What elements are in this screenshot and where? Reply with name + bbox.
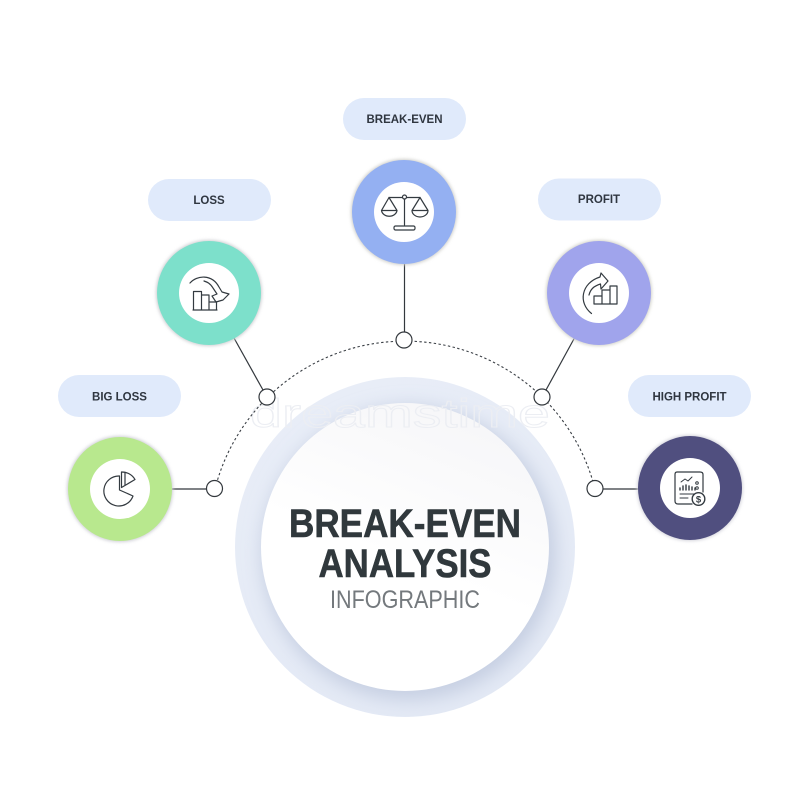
label: profit — [538, 178, 661, 220]
connector: break-even — [396, 264, 412, 348]
icon: financial report — [675, 472, 705, 505]
watermark: dreamstime — [250, 392, 550, 436]
label: big loss: BIG LOSS — [92, 392, 147, 404]
connector: big loss — [172, 480, 222, 496]
title: ANALYSIS — [318, 542, 492, 586]
central circle — [235, 377, 575, 717]
label: loss: LOSS — [193, 195, 225, 207]
icon: balance scale — [382, 195, 428, 230]
label: high profit: HIGH PROFIT — [652, 392, 727, 404]
label: break-even — [343, 98, 466, 140]
title: BREAK-EVEN — [289, 502, 521, 546]
connector: loss — [234, 338, 275, 405]
node: big loss — [67, 436, 173, 542]
dotted arc — [215, 341, 595, 489]
node: profit — [546, 240, 652, 346]
label: profit: PROFIT — [578, 194, 620, 206]
icon: rising bars with arrow — [583, 273, 617, 314]
title — [289, 502, 521, 614]
label: big loss — [58, 375, 181, 417]
node: high profit — [637, 435, 743, 541]
node: loss — [156, 240, 262, 346]
label: high profit — [628, 375, 751, 417]
connector: profit — [534, 337, 575, 405]
label: break-even: BREAK-EVEN — [366, 114, 443, 126]
icon: dollar sign: $ — [696, 494, 702, 506]
icon: pie chart — [104, 472, 135, 506]
icon: falling bars with arrow — [190, 277, 229, 310]
connector: high profit — [587, 480, 638, 496]
title: INFOGRAPHIC — [330, 586, 480, 614]
node: break-even — [351, 159, 457, 265]
label: loss — [148, 179, 271, 221]
